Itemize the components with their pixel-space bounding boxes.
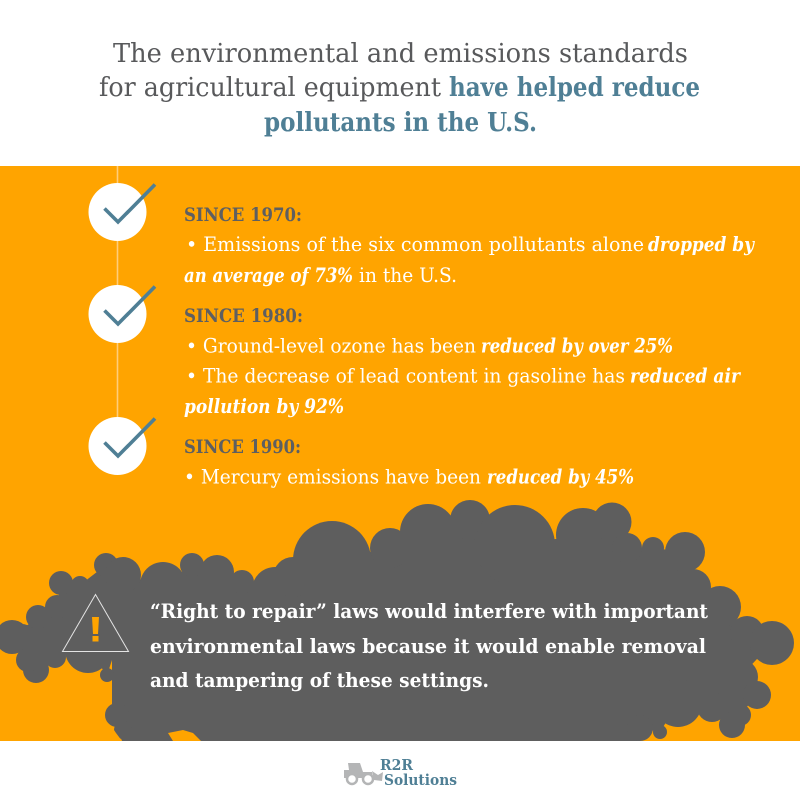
icon: tractor bbox=[344, 763, 383, 784]
section: since 1970: • Emissions of the six common pollutants alone bbox=[186, 233, 644, 256]
warning icon bbox=[62, 594, 128, 652]
section: since 1970: dropped by bbox=[648, 233, 755, 256]
section: since 1970 bbox=[184, 205, 755, 287]
check marker 1980 bbox=[88, 285, 155, 343]
check marker 1970 bbox=[88, 183, 155, 241]
title: The environmental and emissions standards bbox=[113, 39, 688, 69]
title: pollutants in the U.S. bbox=[264, 108, 537, 138]
logo bbox=[344, 756, 457, 789]
logo name: Solutions bbox=[384, 771, 457, 789]
section: since 1970: in the U.S. bbox=[359, 264, 457, 287]
section: since 1970: SINCE 1970: bbox=[184, 205, 302, 226]
title: have helped reduce bbox=[449, 73, 700, 103]
smog cloud bbox=[0, 500, 794, 741]
section: since 1990: reduced by 45% bbox=[487, 466, 634, 488]
section: since 1980 bbox=[184, 306, 742, 418]
warning text: environmental laws because it would enable removal bbox=[150, 634, 706, 658]
section: since 1980: SINCE 1980: bbox=[184, 306, 303, 327]
section: since 1990 bbox=[184, 437, 634, 488]
section: since 1980: • Ground-level ozone has been bbox=[186, 334, 476, 358]
section: since 1990: • Mercury emissions have been bbox=[184, 466, 481, 488]
cloud bottom notches bbox=[108, 723, 201, 741]
section: since 1980: reduced by over 25% bbox=[481, 334, 673, 358]
warning text: “Right to repair” laws would interfere with important bbox=[150, 599, 709, 623]
logo name: R2R bbox=[380, 756, 413, 774]
title bbox=[99, 39, 700, 138]
timeline line bbox=[117, 166, 118, 446]
orange panel bbox=[0, 166, 800, 741]
section: since 1980: pollution by 92% bbox=[184, 395, 344, 418]
section: since 1990: SINCE 1990: bbox=[184, 437, 301, 458]
section: since 1980: • The decrease of lead content in gasoline has bbox=[186, 364, 625, 388]
section: since 1970: an average of 73% bbox=[184, 264, 353, 287]
title: for agricultural equipment bbox=[99, 73, 442, 103]
warning text bbox=[150, 599, 709, 692]
check marker 1990 bbox=[88, 417, 155, 475]
logo name bbox=[380, 756, 457, 789]
warning text: and tampering of these settings. bbox=[150, 668, 489, 692]
section: since 1980: reduced air bbox=[630, 364, 742, 388]
